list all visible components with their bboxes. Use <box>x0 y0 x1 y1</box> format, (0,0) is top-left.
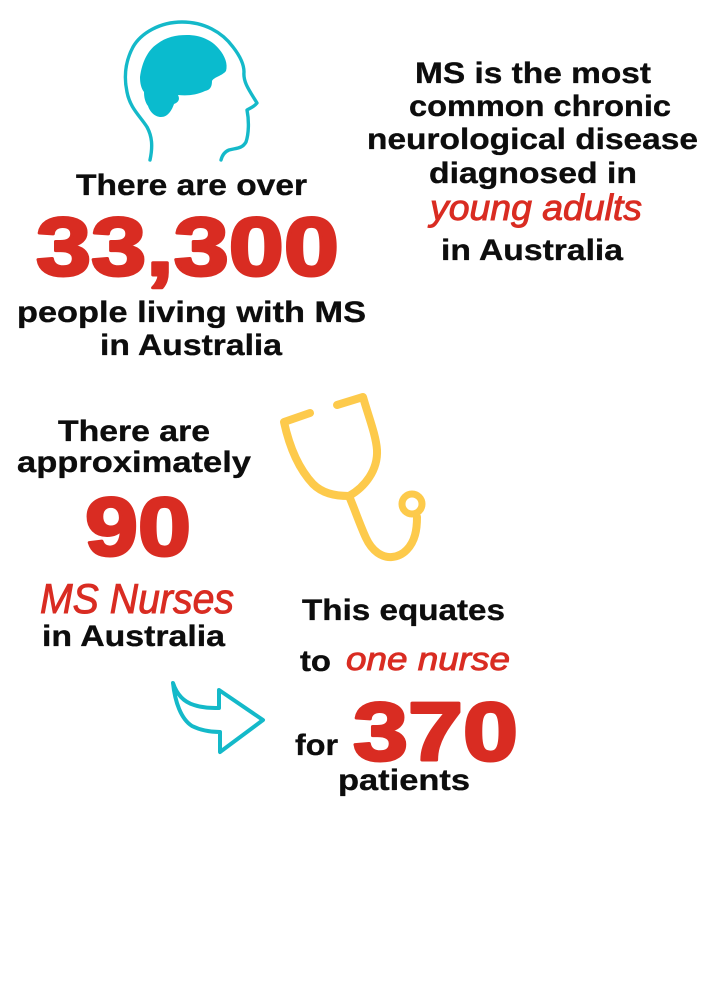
text: most common chronic neurological disease <box>367 57 698 267</box>
text: there are over 33,300 <box>17 169 366 362</box>
text: most common chronic neurological disease: diagnosed in <box>429 157 637 190</box>
text: most common chronic neurological disease: in Australia <box>441 234 623 267</box>
icon: head with brain <box>125 22 257 160</box>
text: most common chronic neurological disease: neurological disease <box>367 123 698 156</box>
text: there are over 33,300: There are over <box>76 169 307 202</box>
text: approximately 90 MS Nurses: in Australia <box>42 620 225 653</box>
text: approximately 90 MS Nurses: MS Nurses <box>40 575 234 622</box>
text: approximately 90 MS Nurses <box>17 415 251 653</box>
text: one nurse for 370 patients: This equates <box>302 594 505 627</box>
text: there are over 33,300: 33,300 <box>36 200 339 293</box>
text: most common chronic neurological disease: young adults <box>427 187 642 228</box>
text: approximately 90 MS Nurses: 90 <box>85 480 191 573</box>
text: one nurse for 370 patients: to <box>300 645 331 678</box>
text: one nurse for 370 patients: 370 <box>353 685 518 778</box>
text: one nurse for 370 patients: for <box>295 729 338 762</box>
text: one nurse for 370 patients: patients <box>338 764 470 797</box>
text: approximately 90 MS Nurses: There are <box>58 415 210 448</box>
icon: arrow <box>173 683 263 752</box>
text: most common chronic neurological disease: common chronic <box>409 90 671 123</box>
text: one nurse for 370 patients <box>295 594 518 797</box>
text: approximately 90 MS Nurses: approximately <box>17 446 251 479</box>
icon: stethoscope <box>284 397 422 557</box>
text: most common chronic neurological disease: MS is the most <box>415 57 651 90</box>
text: there are over 33,300: people living with MS <box>17 296 366 329</box>
text: one nurse for 370 patients: one nurse <box>346 641 510 677</box>
text: there are over 33,300: in Australia <box>100 329 282 362</box>
